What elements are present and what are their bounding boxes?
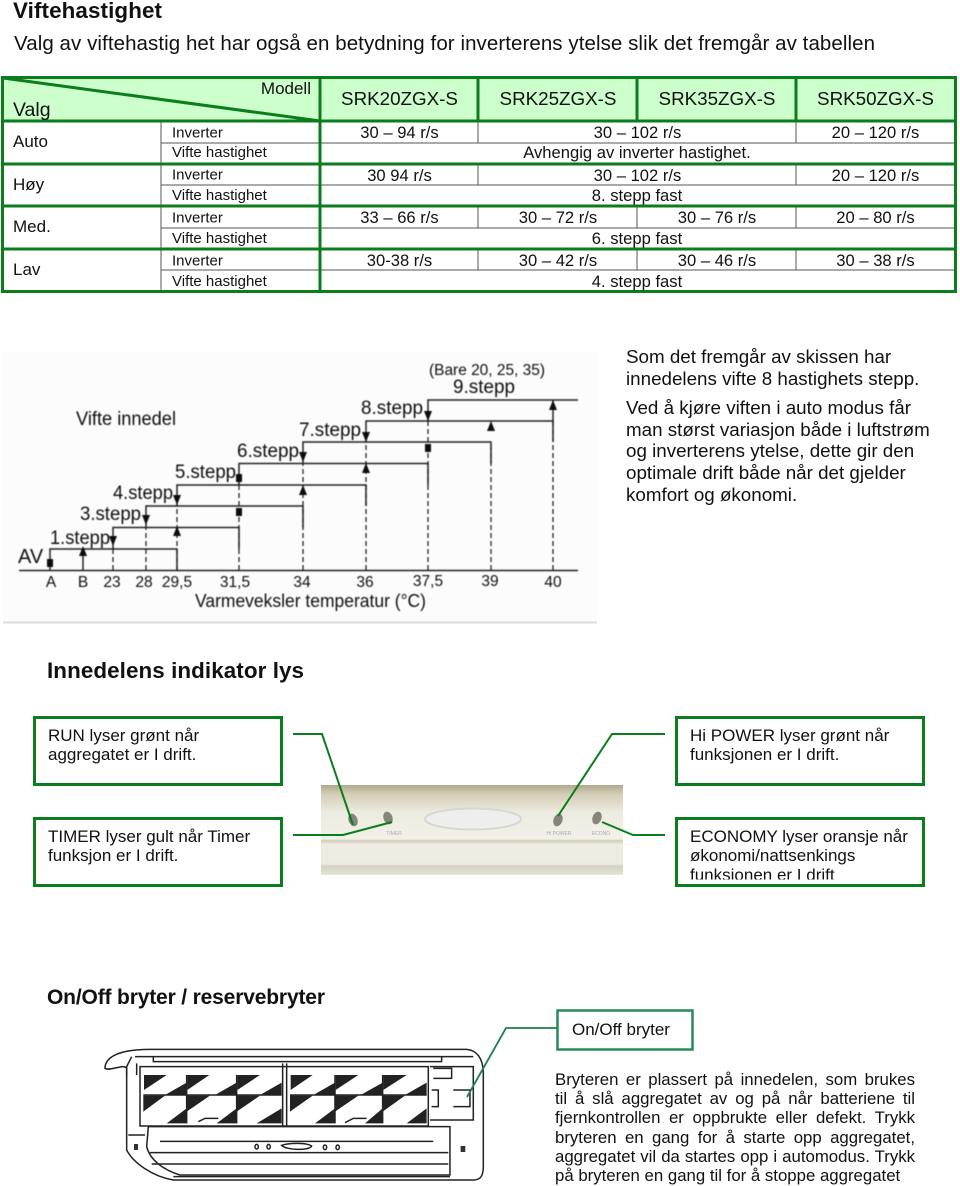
text block: on/off switch description: Bryteren er plassert på innedelen, som brukes — [555, 1070, 915, 1088]
row labels: Inverter — [172, 166, 223, 184]
heading: indicator lights: Innedelens indikator lys — [47, 658, 304, 683]
table values: 20 – 120 r/s — [832, 166, 919, 185]
table values: 33 – 66 r/s — [360, 208, 439, 227]
unit outline — [105, 1049, 483, 1180]
step labels: 3.stepp — [80, 504, 141, 525]
table values: 30 – 102 r/s — [594, 166, 681, 185]
chart: fan step diagram — [3, 352, 597, 622]
axis tick labels: 23 — [103, 574, 121, 591]
table values: 30 94 r/s — [367, 166, 432, 185]
callout: On/Off switch — [558, 1010, 692, 1050]
axis — [19, 570, 578, 572]
text block: on/off switch description: på bryteren en gang til for å stoppe aggregatet — [555, 1166, 900, 1185]
callout: RUN: RUN lyser grønt når — [48, 726, 199, 745]
text block: fan mode explanation: optimale drift både når det gjelder — [626, 462, 906, 483]
step labels: 5.stepp — [175, 462, 236, 483]
axis tick labels: 29,5 — [162, 574, 192, 591]
subtitle: Valg av viftehastig het har også en betydning for inverterens ytelse slik det fremgår av tabellen — [14, 32, 875, 55]
mode labels — [13, 132, 51, 279]
table values: Avhengig av inverter hastighet. — [523, 143, 751, 162]
callout: RUN — [34, 718, 282, 784]
filter pattern — [143, 1075, 427, 1123]
text block: fan mode explanation: Som det fremgår av skissen har — [626, 346, 891, 367]
mode labels: Lav — [13, 260, 41, 279]
text block: on/off switch description: aggregatet vil da startes opp i automodus. Trykk — [555, 1147, 915, 1166]
text block: fan mode explanation — [626, 346, 930, 505]
table values: 30 – 94 r/s — [360, 123, 439, 142]
table values: 30 – 72 r/s — [519, 208, 597, 227]
photo: indoor unit indicator panel: Hi POWER — [546, 831, 572, 837]
axis tick labels: B — [78, 574, 88, 591]
table values: 30 – 38 r/s — [836, 251, 915, 270]
text block: fan mode explanation: komfort og økonomi. — [626, 484, 797, 505]
callout: ECONOMY: funksjonen er I drift — [690, 866, 835, 884]
callout: On/Off switch: On/Off bryter — [572, 1020, 670, 1039]
axis tick labels: 39 — [481, 573, 499, 590]
row labels: Inverter — [172, 124, 223, 142]
callout: ECONOMY: ECONOMY lyser oransje når — [690, 827, 908, 846]
mode labels: Auto — [13, 132, 48, 151]
callout: TIMER: funksjon er I drift. — [48, 846, 178, 865]
step labels: 6.stepp — [237, 441, 299, 462]
step labels: Vifte innedel — [76, 409, 176, 430]
table header labels: SRK20ZGX-S — [341, 88, 458, 109]
step labels: 8.stepp — [361, 398, 423, 419]
callout: TIMER — [34, 818, 282, 886]
step labels: 9.stepp — [453, 377, 515, 398]
callout: TIMER: TIMER lyser gult når Timer — [48, 827, 250, 846]
table values: 20 – 120 r/s — [832, 123, 919, 142]
table values: 8. stepp fast — [592, 186, 683, 205]
chart background — [3, 352, 597, 622]
text block: fan mode explanation: Ved å kjøre viften i auto modus får — [626, 397, 911, 418]
table values: 4. stepp fast — [592, 272, 683, 291]
step labels: 1.stepp — [50, 528, 110, 549]
photo: indoor unit indicator panel — [321, 785, 623, 875]
row labels: Vifte hastighet — [172, 187, 268, 204]
table values: 30 – 46 r/s — [678, 251, 756, 270]
illustration: indoor unit with open front — [105, 1049, 483, 1180]
callout: Hi POWER — [676, 718, 924, 784]
callout: ECONOMY — [676, 818, 924, 886]
photo: indoor unit indicator panel: ECONO — [592, 831, 610, 837]
axis tick labels: A — [46, 574, 57, 591]
table: fan speed by model — [2, 77, 956, 292]
photo: indoor unit indicator panel: TIMER — [386, 831, 402, 837]
text block: fan mode explanation: og inverterens ytelse, dette gir den — [626, 440, 914, 461]
row labels: Vifte hastighet — [172, 273, 268, 290]
step labels — [18, 362, 545, 568]
step lines — [50, 400, 578, 570]
step labels: 7.stepp — [299, 420, 361, 441]
table values: 30 – 76 r/s — [678, 208, 756, 227]
table header labels: SRK35ZGX-S — [659, 88, 775, 109]
row labels — [172, 124, 268, 290]
table values: 20 – 80 r/s — [836, 208, 915, 227]
leader lines to indicators — [293, 734, 665, 835]
text block: on/off switch description: bryteren en gang for å starte opp aggregatet, — [555, 1128, 915, 1147]
leader line to switch — [467, 1028, 557, 1097]
step labels: (Bare 20, 25, 35) — [429, 362, 545, 379]
row labels: Vifte hastighet — [172, 230, 268, 247]
callout: RUN: aggregatet er I drift. — [48, 745, 196, 764]
table values: 30-38 r/s — [367, 251, 432, 270]
row labels: Vifte hastighet — [172, 144, 268, 161]
table values: 6. stepp fast — [592, 229, 683, 248]
mode labels: Med. — [13, 217, 51, 236]
table header labels: SRK50ZGX-S — [817, 88, 934, 109]
row labels: Inverter — [172, 252, 223, 270]
text block: on/off switch description — [555, 1070, 915, 1185]
table header labels: Modell — [261, 79, 311, 98]
axis title: Varmeveksler temperatur (°C) — [195, 591, 426, 611]
axis tick labels: 34 — [293, 574, 311, 591]
callout: Hi POWER: funksjonen er I drift. — [690, 745, 839, 764]
mode labels: Høy — [13, 175, 45, 194]
axis tick labels: 36 — [356, 574, 374, 591]
step labels: 4.stepp — [113, 483, 173, 504]
callout: ECONOMY: økonomi/nattsenkings — [690, 846, 855, 865]
heading: on/off switch: On/Off bryter / reservebryter — [47, 986, 325, 1009]
text block: fan mode explanation: innedelens vifte 8 hastighets stepp. — [626, 368, 919, 389]
dashed guide lines — [113, 421, 553, 570]
table header background — [3, 78, 955, 121]
axis tick labels: 37,5 — [413, 573, 443, 590]
text block: fan mode explanation: man størst variasjon både i luftstrøm — [626, 419, 930, 440]
table header labels — [13, 79, 934, 121]
arrow markers — [47, 400, 557, 567]
step labels: AV — [18, 546, 44, 568]
table header labels: Valg — [13, 99, 51, 121]
text block: on/off switch description: fjernkontrollen er oppbrukte eller defekt. Trykk — [555, 1108, 915, 1127]
table values: 30 – 102 r/s — [594, 123, 681, 142]
table values: 30 – 42 r/s — [519, 251, 597, 270]
axis tick labels: 28 — [135, 574, 153, 591]
row labels: Inverter — [172, 210, 223, 226]
table values — [360, 123, 919, 291]
axis tick labels: 31,5 — [220, 574, 250, 591]
axis tick labels — [46, 573, 562, 591]
callout: Hi POWER: Hi POWER lyser grønt når — [690, 726, 890, 745]
axis tick labels: 40 — [544, 574, 562, 591]
table header labels: SRK25ZGX-S — [500, 88, 616, 109]
text block: on/off switch description: til å slå aggregatet av og på når batteriene til — [555, 1089, 915, 1108]
